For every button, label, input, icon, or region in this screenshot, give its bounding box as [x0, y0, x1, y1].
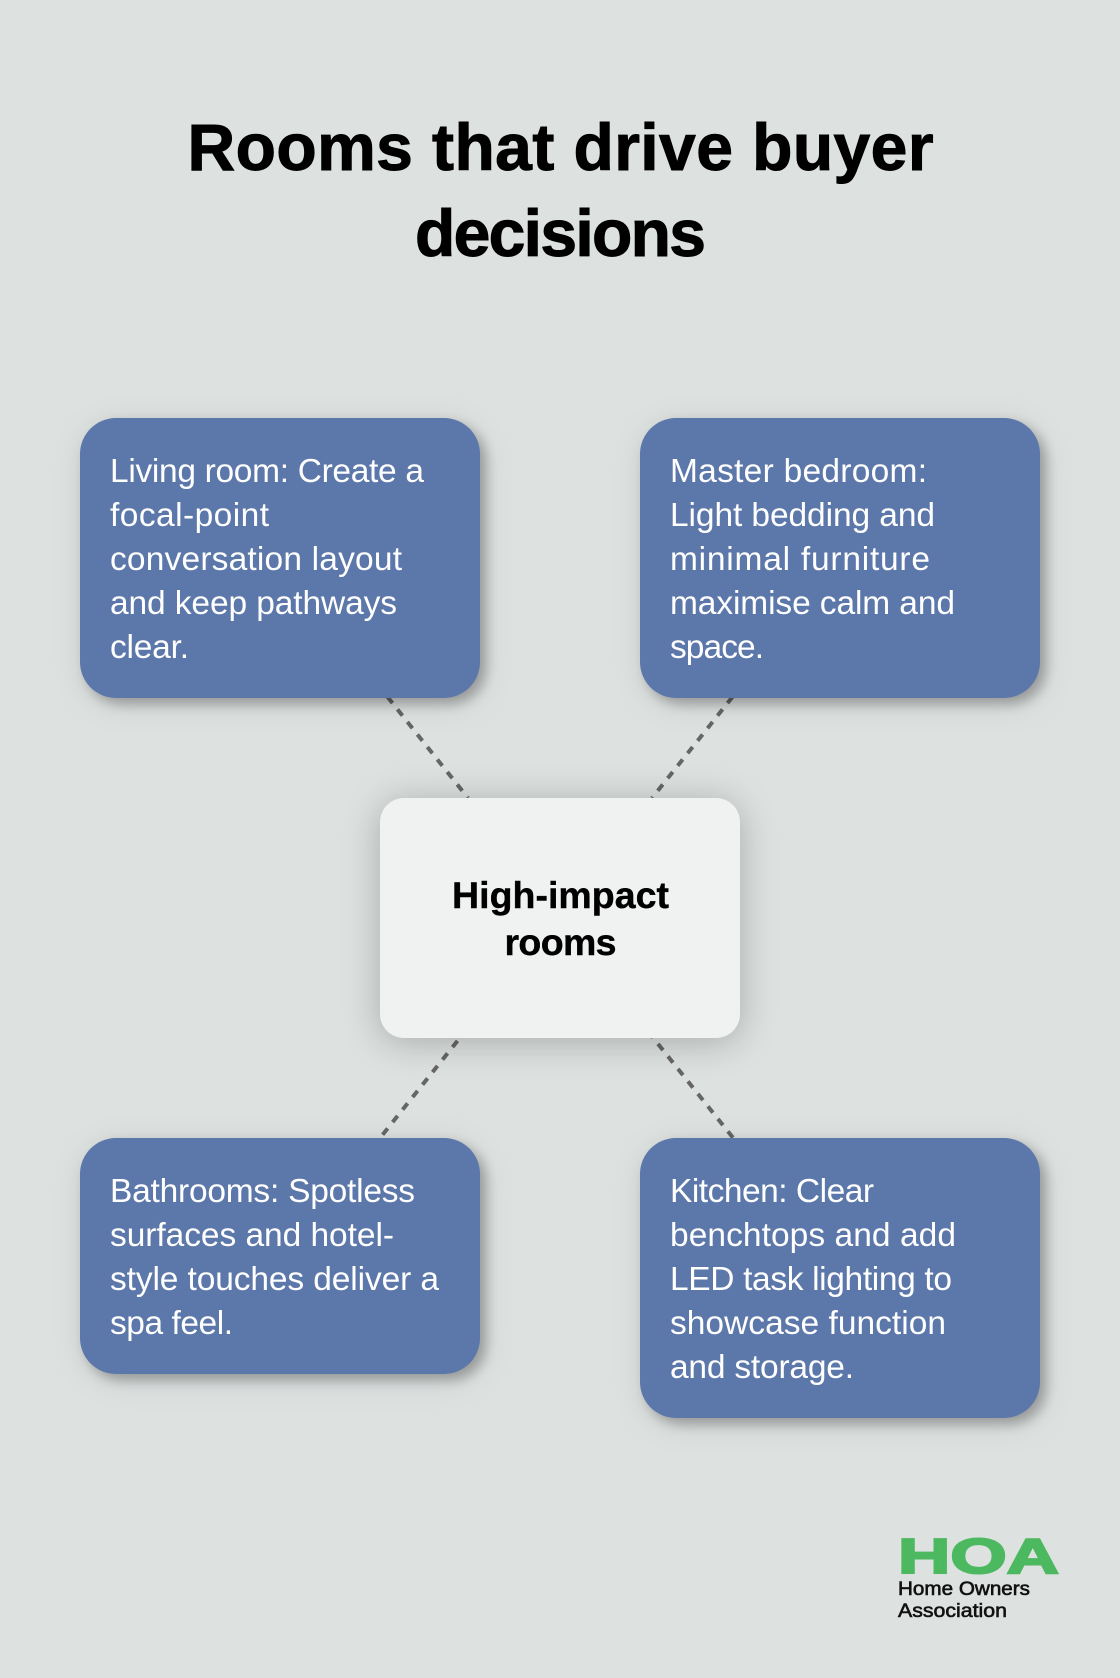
panel: master bedroom: Master bedroom:	[670, 453, 927, 490]
panel: kitchen: Kitchen: Clear	[670, 1173, 874, 1210]
connector: master bedroom to centre	[652, 697, 732, 798]
panel: bathrooms: surfaces and hotel-	[110, 1217, 394, 1254]
title: Rooms that drive buyer	[188, 110, 934, 184]
panel: master bedroom	[640, 418, 1040, 698]
title	[188, 110, 934, 270]
panel: bathrooms	[80, 1138, 480, 1374]
connector: bathrooms to centre	[380, 1041, 458, 1138]
connector: kitchen to centre	[648, 1031, 734, 1139]
panel: master bedroom: space.	[670, 629, 764, 666]
panel: living room: Living room: Create a	[110, 453, 424, 490]
logo: HOA Home Owners Association: HOA	[898, 1530, 1059, 1584]
panel: bathrooms: style touches deliver a	[110, 1261, 439, 1298]
panel: bathrooms: Bathrooms: Spotless	[110, 1173, 415, 1210]
panel: living room: conversation layout	[110, 541, 403, 578]
logo: HOA Home Owners Association	[898, 1530, 1059, 1622]
panel: kitchen: showcase function	[670, 1305, 946, 1342]
panel: bathrooms: spa feel.	[110, 1305, 233, 1342]
panel: living room: clear.	[110, 629, 189, 666]
panel: living room: focal-point	[110, 497, 270, 534]
panel: living room: and keep pathways	[110, 585, 397, 622]
panel: master bedroom: maximise calm and	[670, 585, 955, 622]
panel: kitchen: LED task lighting to	[670, 1261, 952, 1298]
panel: master bedroom: Light bedding and	[670, 497, 935, 534]
panel: high-impact rooms centre: High-impact	[452, 874, 670, 916]
logo: HOA Home Owners Association: Association	[898, 1601, 1007, 1622]
panel: master bedroom: minimal furniture	[670, 541, 930, 578]
panel: high-impact rooms centre: rooms	[504, 921, 616, 963]
panel: kitchen: benchtops and add	[670, 1217, 956, 1254]
connector: living room to centre	[388, 697, 468, 798]
panel: kitchen: and storage.	[670, 1349, 854, 1386]
panel: living room	[80, 418, 480, 698]
title: decisions	[415, 196, 706, 270]
panel: high-impact rooms centre	[380, 798, 740, 1038]
logo: HOA Home Owners Association: Home Owners	[898, 1579, 1030, 1600]
panel: kitchen	[640, 1138, 1040, 1418]
